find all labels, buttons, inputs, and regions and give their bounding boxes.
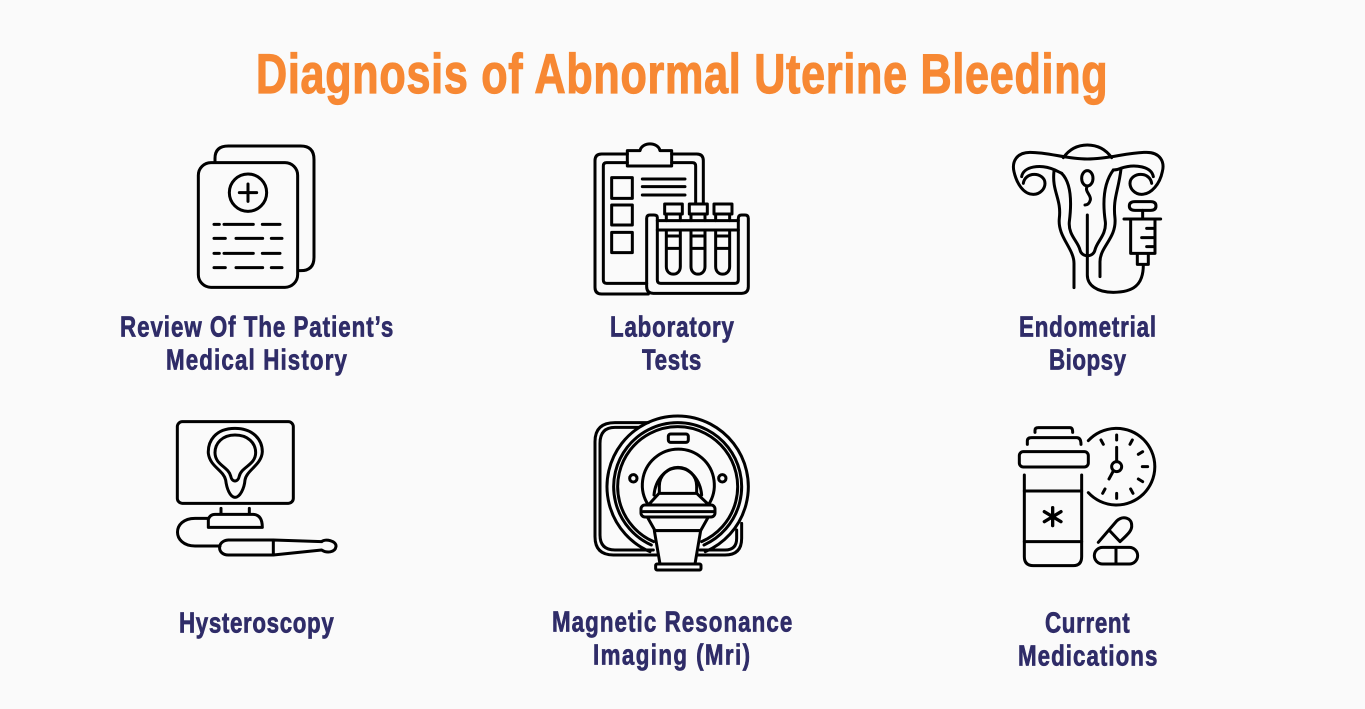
label: review of the patient's medical history xyxy=(120,312,393,376)
label: magnetic resonance imaging: Imaging (Mri) xyxy=(593,640,750,671)
label: magnetic resonance imaging: Magnetic Resonance xyxy=(552,607,792,638)
title: Diagnosis of Abnormal Uterine Bleeding xyxy=(256,43,1108,105)
icon: medical history documents xyxy=(198,146,314,287)
label: current medications: Current xyxy=(1045,608,1130,639)
label: endometrial biopsy: Endometrial xyxy=(1019,312,1156,343)
label: current medications xyxy=(1018,608,1157,672)
label: endometrial biopsy: Biopsy xyxy=(1049,345,1127,376)
label: endometrial biopsy xyxy=(1019,312,1156,376)
label: laboratory tests: Laboratory xyxy=(610,312,734,343)
label: review of the patient's medical history: Medical History xyxy=(166,345,347,376)
label: current medications: Medications xyxy=(1018,641,1157,672)
label: review of the patient's medical history: Review Of The Patient’s xyxy=(120,312,393,343)
icon: MRI scanner xyxy=(595,416,748,570)
icon: hysteroscopy monitor and probe xyxy=(177,422,336,555)
label: hysteroscopy: Hysteroscopy xyxy=(179,608,334,639)
label: laboratory tests xyxy=(610,312,734,376)
label: magnetic resonance imaging xyxy=(552,607,792,671)
icon: clipboard and test tubes xyxy=(595,144,748,294)
icon: medications and clock xyxy=(1019,428,1155,566)
icon: uterus and syringe xyxy=(1013,145,1163,292)
label: laboratory tests: Tests xyxy=(642,345,701,376)
